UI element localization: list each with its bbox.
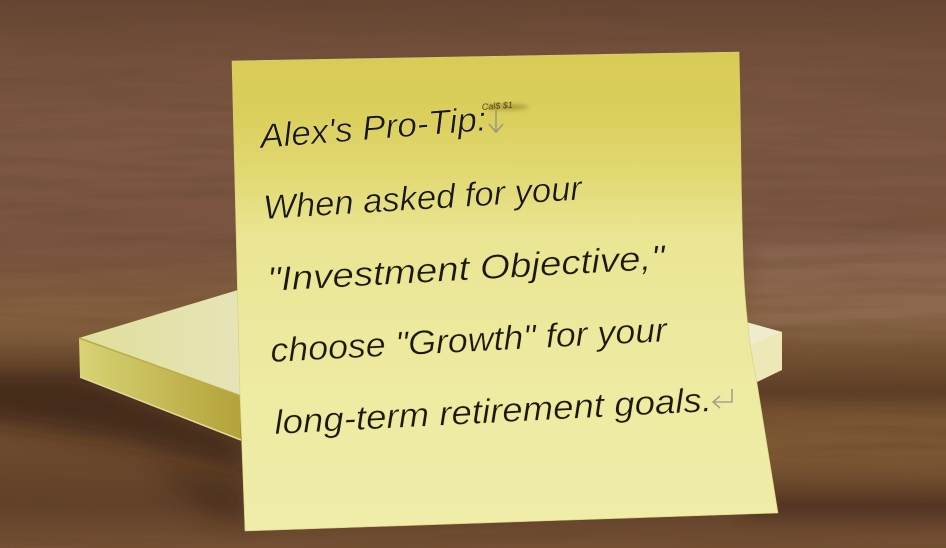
- note body line 3: choose "Growth" for your: [269, 311, 670, 370]
- note body line 1: When asked for your: [262, 169, 585, 227]
- icon: down arrow mark: [489, 110, 503, 132]
- back note pad, right side: [746, 322, 782, 383]
- smudge above heading: Cal$ $1: [481, 100, 513, 112]
- note heading: Alex's Pro-Tip:: [257, 100, 488, 156]
- smudge above heading: [481, 100, 529, 112]
- front sticky note: [232, 52, 778, 531]
- note body line 2: "Investment Objective,": [266, 239, 668, 299]
- note body line 4: long-term retirement goals.: [273, 381, 713, 442]
- back note pad, left side: [79, 290, 241, 440]
- icon: return arrow mark: [713, 389, 732, 408]
